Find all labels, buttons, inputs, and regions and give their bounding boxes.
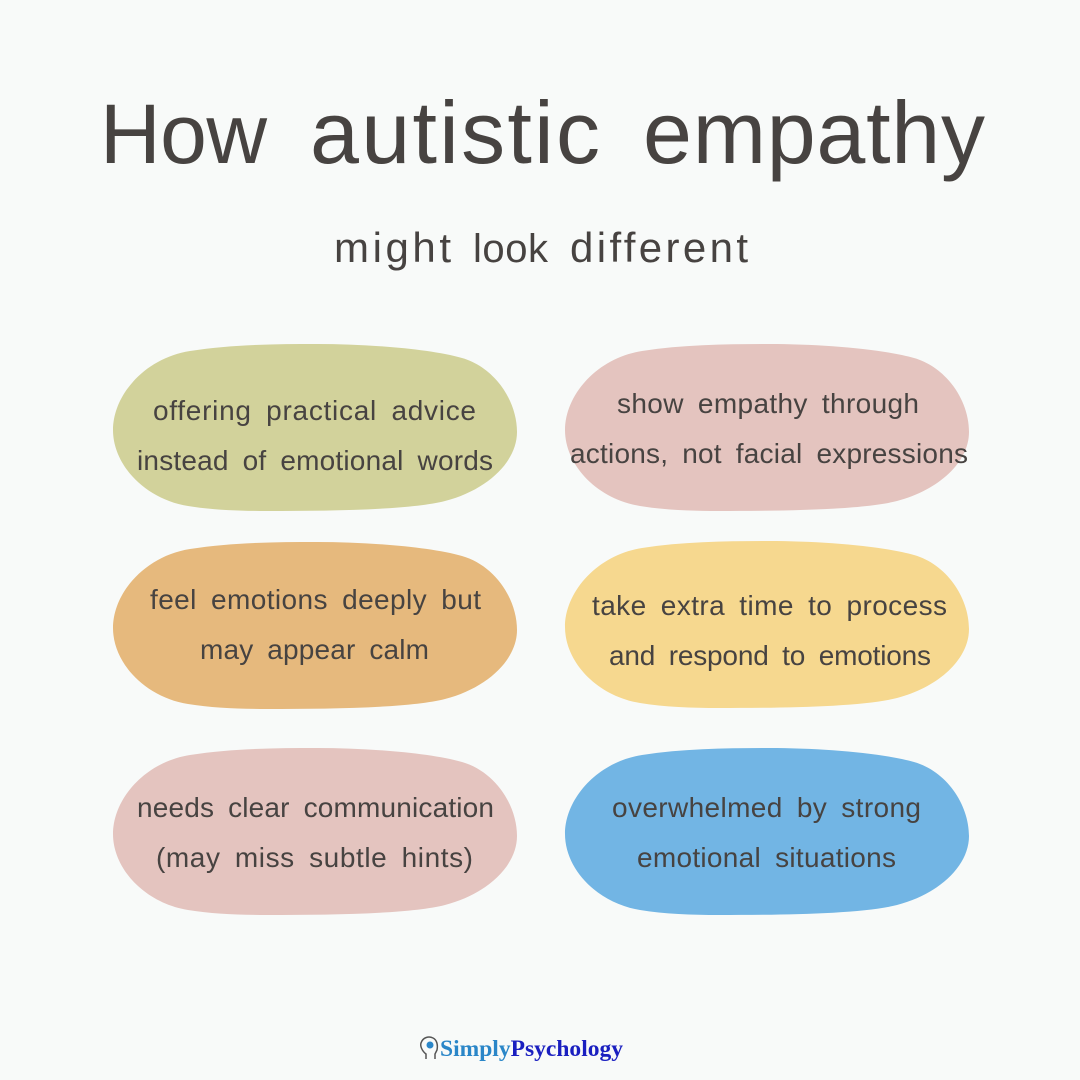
panel: overwhelmed (565, 748, 969, 915)
panel: extra time (565, 541, 969, 708)
panel: feel emotions: may appear calm (200, 634, 429, 665)
panel: overwhelmed: overwhelmed by strong (612, 792, 921, 823)
logo: Simply Psychology: SimplyPsychology (440, 1036, 623, 1062)
panel: overwhelmed: emotional situations (637, 842, 896, 873)
panel: extra time: take extra time to process (592, 590, 947, 621)
panel: practical advice: offering practical advice (153, 395, 476, 426)
panel: extra time: and respond to emotions (609, 640, 931, 671)
panel: clear communication: needs clear communication (137, 792, 494, 823)
panel: actions (565, 344, 969, 511)
subtitle (334, 224, 748, 271)
panel: feel emotions (113, 542, 517, 709)
panel: practical advice (113, 344, 517, 511)
icon: head with bulb (421, 1037, 437, 1059)
panel: actions: actions, not facial expressions (570, 438, 968, 469)
title: empathy (643, 83, 985, 182)
panel: clear communication (113, 748, 517, 915)
panel: clear communication: (may miss subtle hints) (156, 842, 473, 873)
panel: feel emotions: feel emotions deeply but (150, 584, 481, 615)
subtitle: look (473, 227, 549, 271)
subtitle: different (570, 224, 748, 271)
title: How (100, 87, 267, 181)
panel: practical advice: instead of emotional words (137, 445, 493, 476)
panel: actions: show empathy through (617, 388, 919, 419)
title (100, 83, 985, 182)
title: autistic (310, 83, 600, 182)
subtitle: might (334, 224, 451, 271)
